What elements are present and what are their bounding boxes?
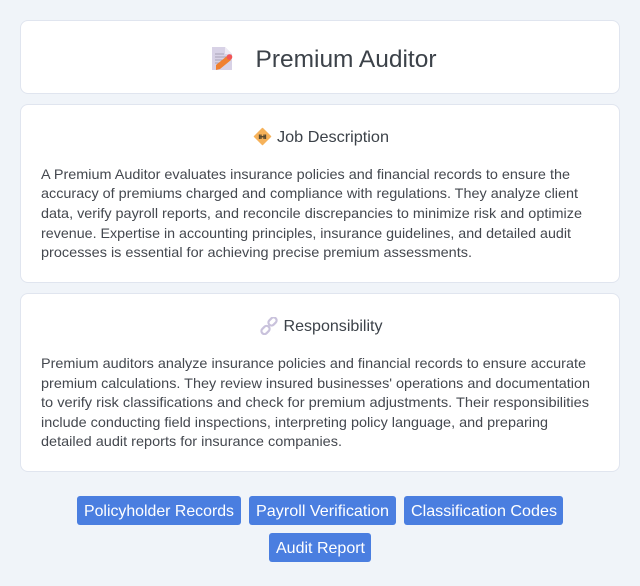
- tag: payroll verification: Payroll Verification: [256, 503, 389, 520]
- panel: title: [20, 20, 620, 94]
- text block: job description: accuracy of premiums charged and compliance with regulations. They analyze client: [41, 185, 578, 201]
- tag: audit report: Audit Report: [276, 540, 366, 557]
- icon: diamond sign: [254, 128, 272, 146]
- text block: job description: revenue. Expertise in accounting principles, insurance guidelines, and detailed audit: [41, 225, 571, 241]
- tag: policyholder records: Policyholder Records: [84, 503, 234, 520]
- tag: policyholder records: [77, 496, 241, 525]
- tag: audit report: [269, 533, 371, 562]
- title text: Premium Auditor: [256, 46, 436, 73]
- heading: job description: Job Description: [277, 129, 389, 146]
- tag: classification codes: Classification Codes: [411, 503, 557, 520]
- text block: responsibility: to verify risk classifications and check for premium adjustments. Their responsibilities: [41, 394, 589, 410]
- text block: responsibility: include conducting field inspections, interpreting policy language, and preparing: [41, 414, 548, 430]
- text block: job description: A Premium Auditor evaluates insurance policies and financial records to ensure the: [41, 166, 570, 182]
- text block: responsibility: Premium auditors analyze insurance policies and financial records to ensure accurate: [41, 355, 586, 371]
- icon: document with pencil: [212, 47, 232, 70]
- text block: responsibility: premium calculations. They review insured businesses' operations and documentation: [41, 375, 590, 391]
- text block: job description: processes is essential for achieving precise premium assessments.: [41, 244, 472, 260]
- icon: chain link: [260, 317, 278, 335]
- panel: job description: [20, 104, 620, 283]
- tag: payroll verification: [249, 496, 396, 525]
- tag: classification codes: [404, 496, 563, 525]
- panel: responsibility: [20, 293, 620, 472]
- heading: responsibility: Responsibility: [284, 318, 382, 335]
- text block: responsibility: [41, 355, 590, 449]
- text block: job description: data, verify payroll reports, and reconcile discrepancies to minimize risk and optimize: [41, 205, 582, 221]
- text block: responsibility: detailed audit reports for insurance companies.: [41, 433, 342, 449]
- text block: job description: [41, 166, 582, 260]
